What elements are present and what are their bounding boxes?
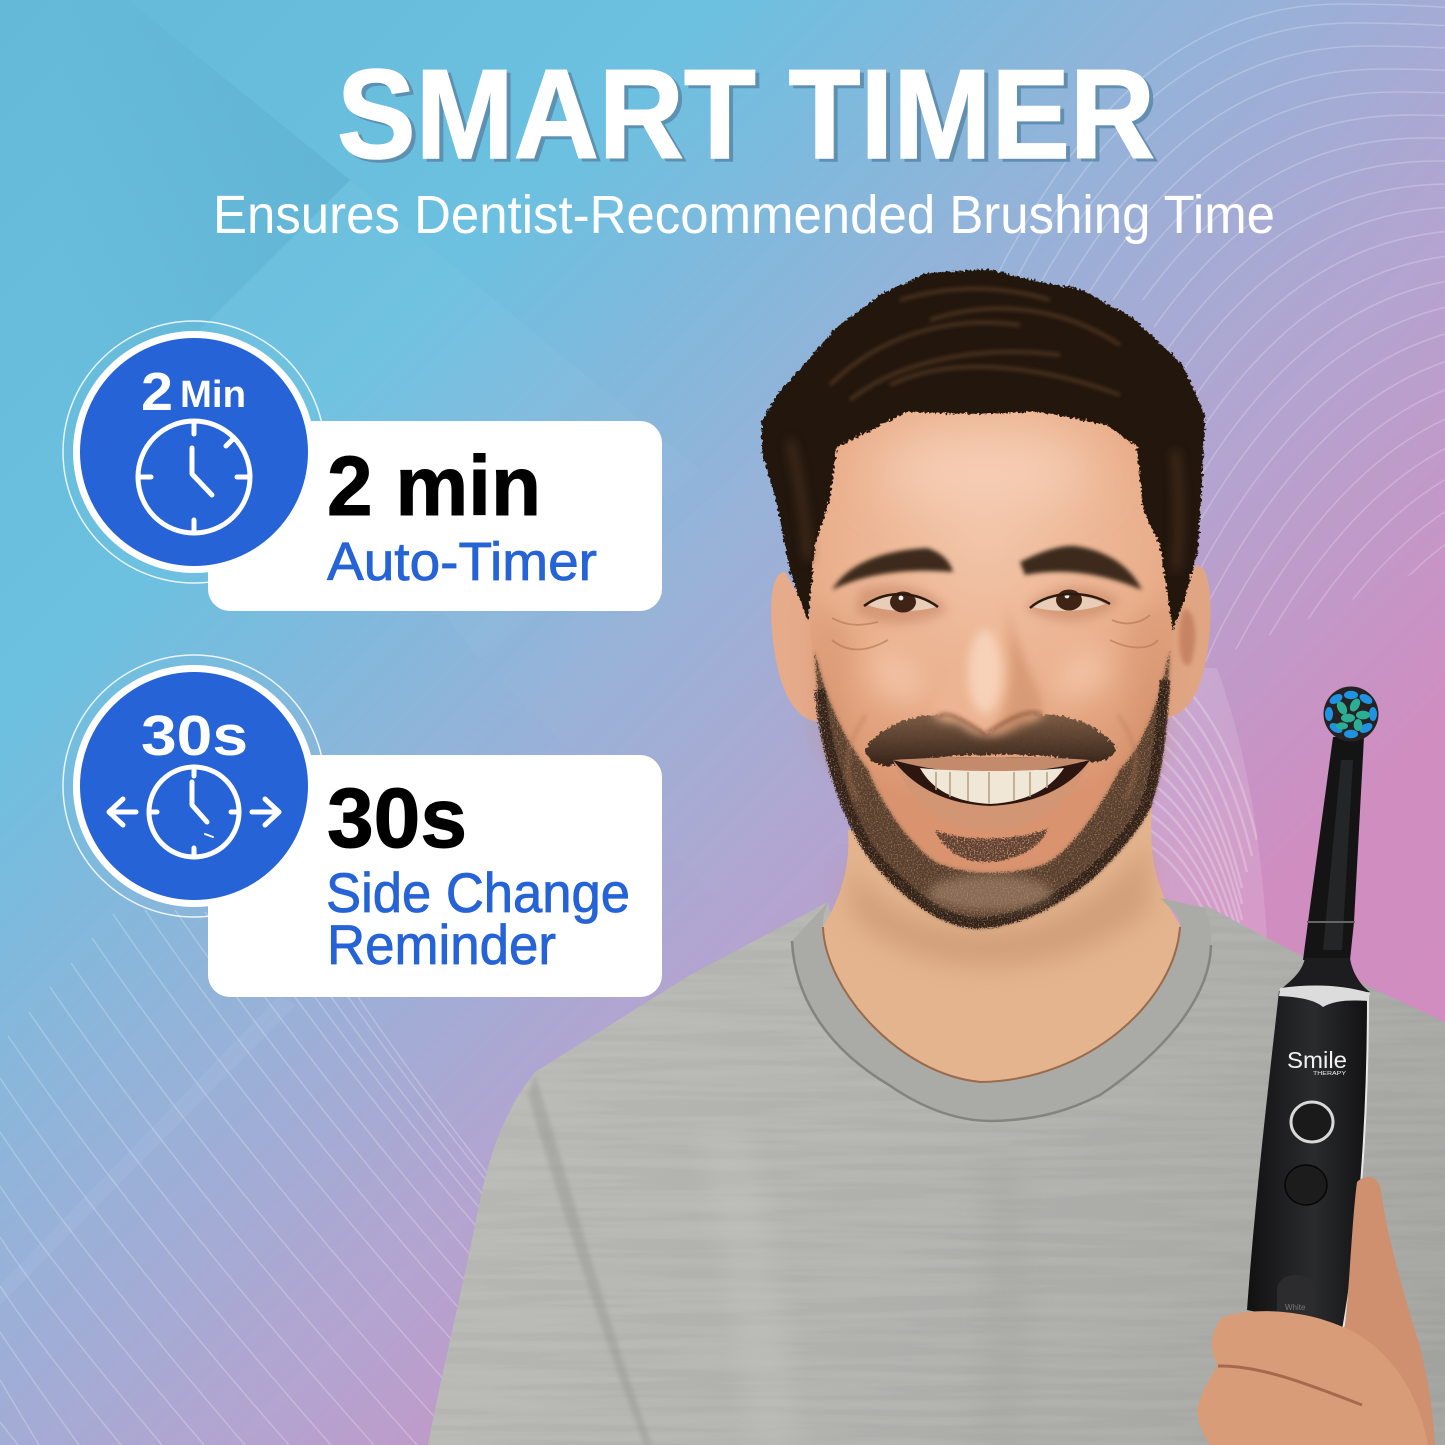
shirt collar bbox=[792, 898, 1211, 1121]
cheek shading bbox=[812, 600, 1175, 800]
crows feet wrinkles bbox=[832, 615, 1158, 649]
outer thin ring bbox=[63, 321, 325, 583]
face bbox=[809, 372, 1173, 928]
mouth cavity bbox=[893, 757, 1090, 806]
thumb bbox=[1300, 1177, 1435, 1445]
heading: 30s bbox=[327, 771, 467, 865]
chin stubble bbox=[928, 875, 1052, 911]
teeth bbox=[920, 768, 1064, 804]
icon: clock bbox=[138, 421, 250, 533]
heading: 2 min bbox=[327, 439, 541, 533]
ring on neck bbox=[1307, 921, 1355, 923]
caption bbox=[326, 861, 630, 976]
beard jaw stubble bbox=[815, 650, 1170, 928]
caption: Side Change bbox=[326, 861, 630, 924]
smile lines bbox=[848, 715, 1135, 800]
badge circle bbox=[76, 334, 312, 570]
title: SMART TIMER bbox=[341, 46, 1159, 188]
background diagonal lines bbox=[0, 910, 716, 1445]
smile bbox=[848, 714, 1135, 830]
beard dark jaw edge bbox=[820, 680, 1165, 923]
hair bbox=[762, 269, 1205, 630]
neck bbox=[823, 800, 1180, 1082]
brush head bbox=[1324, 686, 1378, 742]
upper lip bbox=[893, 757, 1090, 772]
badge label: 30s bbox=[141, 704, 248, 768]
eye shading bbox=[855, 585, 1120, 624]
left ear bbox=[771, 572, 825, 722]
title: SMART TIMER bbox=[337, 43, 1155, 185]
shirt bbox=[428, 902, 1445, 1445]
icon: electric toothbrush: White bbox=[1285, 1303, 1306, 1312]
icon: electric toothbrush bbox=[1247, 686, 1378, 1330]
chrome collar bbox=[1279, 985, 1370, 1007]
background geometric facets bbox=[0, 0, 1000, 1305]
handle shoulder bbox=[1280, 958, 1370, 992]
fingers bbox=[1198, 1311, 1428, 1445]
eyebrows bbox=[832, 546, 1142, 590]
card bbox=[208, 421, 662, 611]
panel: 30s side change reminder bbox=[63, 655, 662, 997]
lower lip bbox=[893, 760, 1090, 830]
right eye bbox=[1030, 590, 1110, 611]
man smiling bbox=[428, 269, 1445, 1445]
logo: THERAPY bbox=[1313, 1071, 1347, 1077]
bristles bbox=[1325, 691, 1377, 738]
forehead highlight bbox=[875, 428, 1095, 512]
icon: clock with arrows bbox=[109, 767, 279, 857]
panel: 2 min auto-timer bbox=[63, 321, 662, 611]
background pale swoosh bbox=[1151, 668, 1267, 938]
beard soft base bbox=[815, 650, 1170, 928]
outer thin ring bbox=[63, 655, 325, 917]
caption: Reminder bbox=[327, 913, 556, 976]
background arcs top right bbox=[998, 3, 1445, 662]
badge label: Min bbox=[180, 374, 246, 416]
subtitle: Ensures Dentist-Recommended Brushing Time bbox=[213, 185, 1275, 245]
logo: Smile bbox=[1287, 1047, 1347, 1073]
badge label bbox=[141, 362, 246, 422]
card bbox=[208, 755, 662, 997]
brush neck bbox=[1303, 737, 1364, 960]
soul patch bbox=[935, 828, 1048, 862]
left eye bbox=[864, 592, 938, 612]
nose bbox=[932, 595, 1045, 735]
mode button bbox=[1277, 1275, 1315, 1325]
power button bbox=[1291, 1102, 1333, 1142]
caption: Auto-Timer bbox=[327, 532, 597, 592]
handle body bbox=[1247, 991, 1368, 1330]
second button bbox=[1285, 1165, 1327, 1205]
right ear bbox=[1160, 566, 1211, 718]
hand holding toothbrush bbox=[1198, 1177, 1435, 1445]
badge circle bbox=[76, 668, 312, 904]
cheek highlights bbox=[872, 650, 1108, 702]
badge label: 2 bbox=[141, 362, 173, 422]
mustache bbox=[865, 714, 1116, 766]
